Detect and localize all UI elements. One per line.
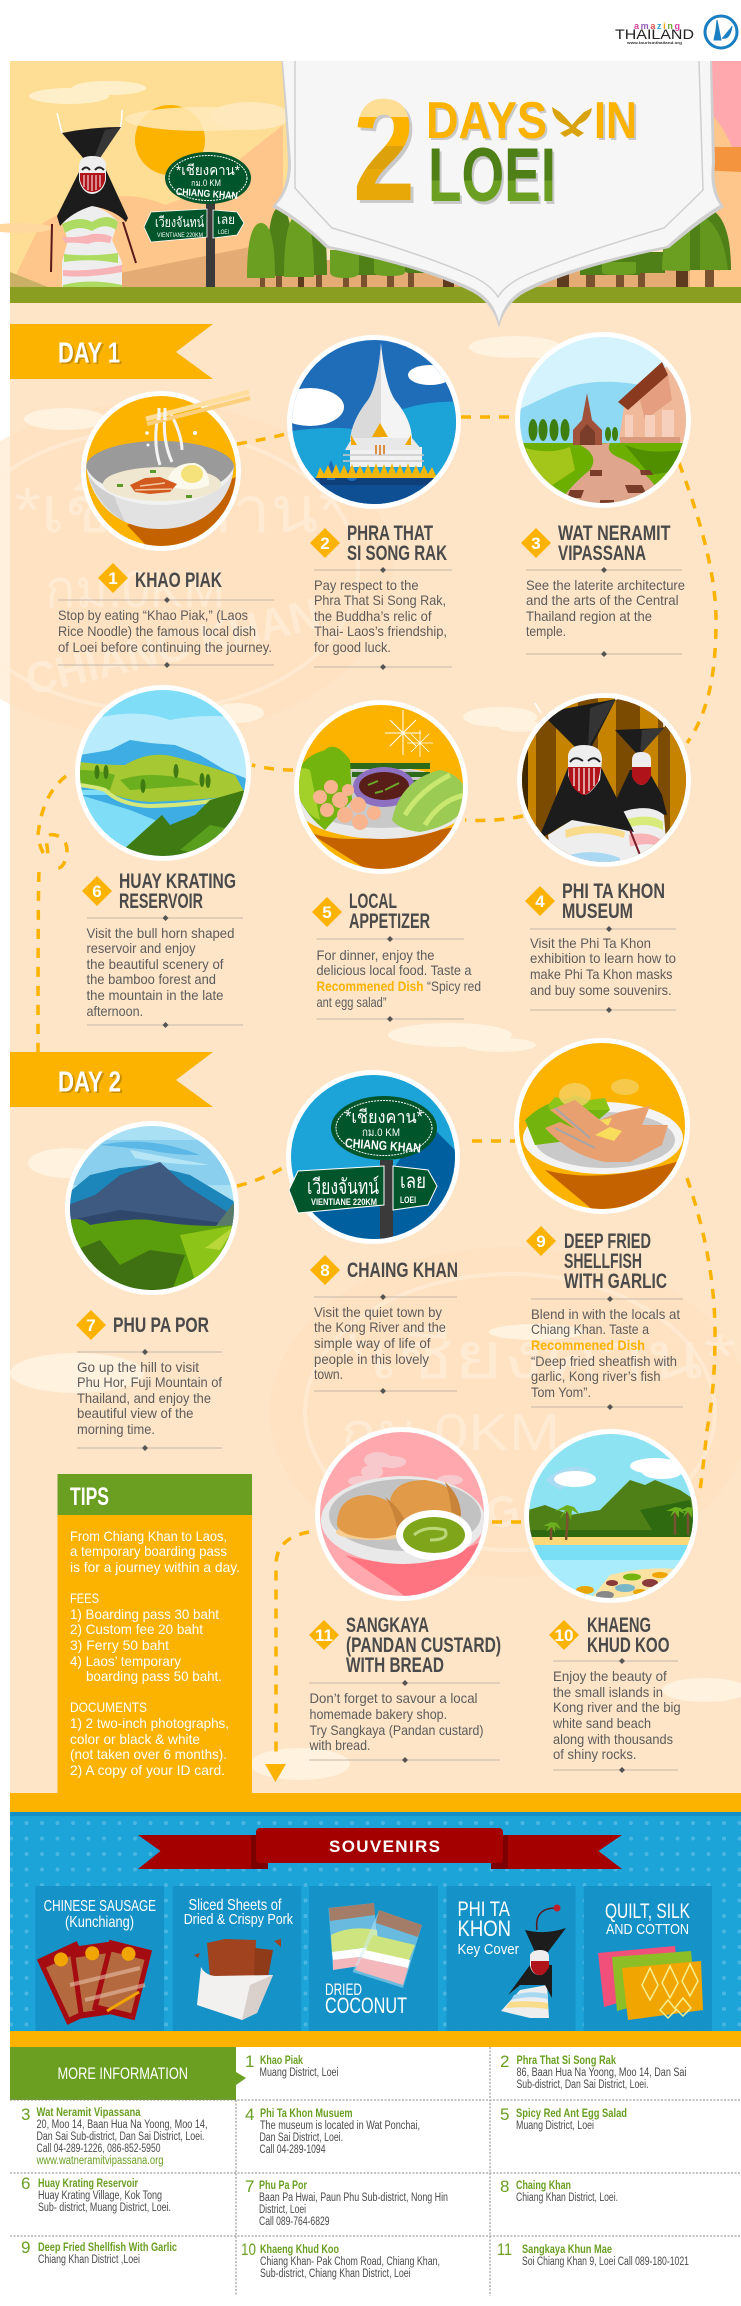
illustration: fried fish plate <box>514 1038 692 1216</box>
heading: Huay Krating Reservoir: HUAY KRATING <box>119 870 236 893</box>
info 3 <box>21 2105 208 2167</box>
logos: Amazing Thailand and TAT seal: amazing <box>634 21 680 31</box>
stop 7: Phu Pa Por <box>64 1120 240 1451</box>
heading: more information <box>10 2047 246 2100</box>
number badge 10 <box>549 1620 579 1650</box>
info 4: Phi Ta Khon Musuem <box>260 2106 353 2120</box>
illustration: Chiang Khan sign: *เชียงคาน* <box>345 1107 423 1127</box>
card: Chinese sausage: CHINESE SAUSAGE <box>44 1898 156 1915</box>
road sign: CHIANG KHAN <box>176 187 238 202</box>
tips text: color or black & white <box>70 1731 200 1747</box>
description: Phu Hor, Fuji Mountain of <box>77 1374 222 1390</box>
illustration: beach <box>524 1429 700 1605</box>
info 1: 1 <box>245 2052 254 2071</box>
card: quilt, silk and cotton: AND COTTON <box>606 1921 689 1938</box>
description: Pay respect to the <box>314 577 419 593</box>
title text: 2 <box>353 69 415 231</box>
description: of shiny rocks. <box>553 1746 636 1762</box>
description: morning time. <box>77 1421 155 1437</box>
background watermarks and clouds: *เชียงคาน* <box>336 1320 736 1392</box>
description: Thailand region at the <box>526 608 652 624</box>
card: dried crispy pork <box>173 1886 301 2031</box>
description: the Buddha’s relic of <box>314 608 432 624</box>
info 1 <box>245 2052 338 2079</box>
card: Chinese sausage <box>36 1886 164 2031</box>
description: Go up the hill to visit <box>77 1359 199 1375</box>
description: make Phi Ta Khon masks <box>530 966 672 982</box>
number badge 1 <box>98 563 128 593</box>
description: Visit the quiet town by <box>314 1304 442 1320</box>
info 5: Spicy Red Ant Egg Salad <box>516 2106 627 2120</box>
panel: tips <box>58 1474 252 1793</box>
heading: Deep Fried Shellfish With Garlic: DEEP FRIED <box>564 1230 651 1253</box>
description: Don’t forget to savour a local <box>310 1690 478 1706</box>
heading: Phi Ta Khon Museum <box>562 880 665 923</box>
banner: souvenirs <box>138 1828 622 1869</box>
day 2 ribbon <box>10 1052 213 1107</box>
heading: Local Appetizer: LOCAL <box>349 890 397 913</box>
description: the Kong River and the <box>314 1319 446 1335</box>
tips text: 1) Boarding pass 30 baht <box>70 1606 219 1622</box>
card: Phi Ta Khon key cover: KHON <box>458 1916 511 1941</box>
info 2: Phra That Si Song Rak <box>516 2053 616 2067</box>
number badge 2 <box>310 528 340 558</box>
description: Chiang Khan. Taste a <box>531 1321 649 1337</box>
description: For dinner, enjoy the <box>316 947 435 963</box>
illustration: Chiang Khan sign: CHIANG KHAN <box>345 1135 421 1156</box>
heading: Chaing Khan: CHAING KHAN <box>347 1259 458 1282</box>
stop 6: Huay Krating Reservoir <box>74 685 252 1028</box>
logos: Amazing Thailand and TAT seal: THAILAND <box>615 26 694 42</box>
heading: Sangkaya <box>346 1614 501 1677</box>
number badge 3 <box>521 528 551 558</box>
info 8 <box>500 2177 618 2204</box>
number badge 5 <box>312 897 342 927</box>
illustration: noodle bowl <box>80 390 250 555</box>
info 4 <box>245 2105 420 2156</box>
info 8: Chiang Khan District, Loei. <box>516 2192 618 2204</box>
number badge 9: 9 <box>536 1232 546 1251</box>
info 9 <box>21 2238 177 2266</box>
title text: 2 <box>356 72 418 234</box>
info 6: Huay Krating Village, Kok Tong <box>38 2190 162 2202</box>
info 5: Muang District, Loei <box>516 2120 594 2132</box>
logos: Amazing Thailand and TAT seal <box>615 16 737 48</box>
number badge 10: 10 <box>555 1626 573 1645</box>
card: quilt, silk and cotton: QUILT, SILK <box>605 1900 690 1923</box>
info 10 <box>241 2240 440 2280</box>
tips text <box>70 1528 240 1778</box>
heading: Wat Neramit Vipassana <box>558 522 671 565</box>
ground strip <box>10 287 741 303</box>
stop 10: Khaeng Khud Koo <box>524 1429 700 1773</box>
tips text: From Chiang Khan to Laos, <box>70 1528 227 1544</box>
heading: Sangkaya: SANGKAYA <box>346 1614 429 1637</box>
number badge 3: 3 <box>531 534 541 553</box>
number badge 6: 6 <box>92 882 102 901</box>
number badge 11: 11 <box>315 1626 333 1645</box>
heading: tips: TIPS <box>70 1483 109 1511</box>
heading: Khaeng Khud Koo <box>587 1614 670 1657</box>
heading: more information: MORE INFORMATION <box>58 2064 188 2083</box>
title text: LOEI <box>428 133 556 218</box>
card: dried crispy pork: Sliced Sheets of <box>188 1897 282 1914</box>
panel: souvenirs <box>10 1812 741 2031</box>
description: Visit the bull horn shaped <box>86 925 234 941</box>
info 7: 7 <box>245 2177 254 2196</box>
description: homemade bakery shop. <box>310 1706 447 1722</box>
info 2: Sub-district, Dan Sai District, Loei. <box>516 2079 648 2091</box>
info 1: Khao Piak <box>260 2053 303 2067</box>
info 7: Call 089-764-6829 <box>259 2216 330 2228</box>
description: Thai- Laos’s friendship, <box>314 623 447 639</box>
info 6: 6 <box>21 2174 30 2193</box>
description <box>530 926 676 1013</box>
description <box>314 1294 457 1394</box>
illustration: Chiang Khan sign: เวียงจันทน์ <box>307 1175 379 1199</box>
info 3: Wat Neramit Vipassana <box>36 2105 141 2119</box>
heading: Deep Fried Shellfish With Garlic <box>564 1230 667 1293</box>
description: delicious local food. Taste a <box>316 962 472 978</box>
info 10: 10 <box>241 2240 256 2259</box>
stop 11: Sangkaya <box>309 1427 501 1763</box>
illustration: masks <box>516 693 692 868</box>
description: Recommened Dish <box>531 1337 645 1353</box>
heading: Deep Fried Shellfish With Garlic: WITH GARLIC <box>564 1270 667 1293</box>
description: beautiful view of the <box>77 1405 194 1421</box>
road sign: *เชียงคาน* <box>176 162 241 178</box>
description: See the laterite architecture <box>526 577 685 593</box>
heading: Local Appetizer <box>349 890 430 933</box>
description: white sand beach <box>552 1715 651 1731</box>
description <box>552 1658 681 1773</box>
Phi Ta Khon figure <box>51 110 136 287</box>
banner: souvenirs: SOUVENIRS <box>329 1837 440 1856</box>
road sign: เวียงจันทน์ <box>155 214 204 230</box>
info 10: Khaeng Khud Koo <box>260 2242 339 2256</box>
stop 5: Local Appetizer <box>293 700 481 1022</box>
card: dried coconut: COCONUT <box>325 1993 407 2018</box>
info 9: Deep Fried Shellfish With Garlic <box>38 2240 177 2254</box>
day 2 ribbon: DAY 2 <box>60 1068 123 1100</box>
dashed route day 2 <box>237 1141 715 1753</box>
heading: Huay Krating Reservoir <box>119 870 236 913</box>
illustration: Chiang Khan sign: กม.0 KM <box>362 1127 400 1139</box>
road sign: VIENTIANE 220KM <box>157 233 203 239</box>
number badge 8: 8 <box>320 1261 330 1280</box>
card: Chinese sausage: (Kunchiang) <box>65 1914 134 1931</box>
description: Try Sangkaya (Pandan custard) <box>310 1722 484 1738</box>
info 5: 5 <box>500 2105 509 2124</box>
dashed route day 1 <box>38 417 716 1052</box>
heading: Phu Pa Por: PHU PA POR <box>113 1314 209 1337</box>
info 3: 20, Moo 14, Baan Hua Na Yoong, Moo 14, <box>36 2119 208 2131</box>
heading: Khao Piak: KHAO PIAK <box>135 569 222 592</box>
info 4: Call 04-289-1094 <box>260 2144 326 2156</box>
road sign <box>144 152 251 287</box>
day 1 ribbon: DAY 1 <box>58 338 120 370</box>
card: Phi Ta Khon key cover <box>446 1886 576 2031</box>
illustration: reservoir <box>74 685 252 865</box>
description: Stop by eating “Khao Piak,” (Laos <box>58 607 248 623</box>
number badge 5: 5 <box>322 903 332 922</box>
background watermarks and clouds: กม.0KM <box>340 1404 560 1462</box>
stop 3: Wat Neramit Vipassana <box>515 332 691 657</box>
description: Tom Yom”. <box>531 1384 591 1400</box>
info 7: Baan Pa Hwai, Paun Phu Sub-district, Nong Hin <box>259 2192 448 2204</box>
road sign: LOEI <box>218 230 229 236</box>
tips text: DOCUMENTS <box>70 1699 147 1715</box>
info 6: Huay Krating Reservoir <box>38 2176 138 2190</box>
background watermarks and clouds: CHIANG KHAN <box>351 1455 655 1570</box>
description: of Loei before continuing the journey. <box>58 639 272 655</box>
description: and the arts of the Central <box>526 592 678 608</box>
heading: Phi Ta Khon Museum: PHI TA KHON <box>562 880 665 903</box>
description: Enjoy the beauty of <box>553 1668 667 1684</box>
info 3: 3 <box>21 2105 30 2124</box>
background watermarks and clouds: กม.0KM <box>45 561 225 619</box>
description: afternoon. <box>86 1003 143 1019</box>
number badge 4: 4 <box>535 892 545 911</box>
background watermarks and clouds: *เชียงคาน* <box>14 474 345 546</box>
title text: DAYS <box>426 92 547 150</box>
number badge 6 <box>82 876 112 906</box>
description: people in this lovely <box>314 1351 429 1367</box>
description: Phra That Si Song Rak, <box>314 592 446 608</box>
description: exhibition to learn how to <box>530 950 676 966</box>
heading: Phra That Si Song Rak: PHRA THAT <box>347 522 433 545</box>
tips text: (not taken over 6 months). <box>70 1746 227 1762</box>
title text: DAYS <box>428 94 549 152</box>
heading: Khaeng Khud Koo: KHAENG <box>587 1614 651 1637</box>
illustration: Chiang Khan sign: เลย <box>400 1171 426 1193</box>
background watermarks and clouds: CHIANG KHAN <box>21 590 325 705</box>
number badge 8 <box>310 1255 340 1285</box>
number badge 1: 1 <box>108 569 118 588</box>
background panel <box>10 61 741 1793</box>
heading: Phi Ta Khon Museum: MUSEUM <box>562 900 633 923</box>
number badge 4 <box>525 886 555 916</box>
info 7: Phu Pa Por <box>259 2178 307 2192</box>
description: the bamboo forest and <box>86 971 216 987</box>
card: quilt, silk and cotton <box>584 1886 712 2031</box>
description: the small islands in <box>553 1684 663 1700</box>
description: town. <box>314 1366 343 1382</box>
illustration: Chiang Khan sign <box>285 1070 465 1250</box>
description: for good luck. <box>314 639 391 655</box>
info 11: 11 <box>497 2240 512 2259</box>
logos: Amazing Thailand and TAT seal: www.tourismthailand.org <box>626 40 683 45</box>
info 8: 8 <box>500 2177 509 2196</box>
description <box>526 567 685 657</box>
arrow: route end <box>265 1764 286 1782</box>
info 11: Sangkaya Khun Mae <box>522 2242 612 2256</box>
description: Rice Noodle) the famous local dish <box>58 623 256 639</box>
info 2: 86, Baan Hua Na Yoong, Moo 14, Dan Sai <box>516 2067 686 2079</box>
description: with bread. <box>309 1737 370 1753</box>
yellow band <box>10 2031 741 2047</box>
road sign: เลย <box>217 212 235 227</box>
stop 2: Phra That Si Song Rak <box>276 335 465 670</box>
illustration: pandan custard and bread <box>314 1427 490 1603</box>
header scene <box>0 61 741 287</box>
description: temple. <box>526 623 566 639</box>
tips text: 1) 2 two-inch photographs, <box>70 1715 229 1731</box>
info 2: 2 <box>500 2052 509 2071</box>
stop 9: Deep Fried Shellfish <box>514 1038 692 1410</box>
heading: Wat Neramit Vipassana: VIPASSANA <box>558 542 646 565</box>
info 7: District, Loei <box>259 2204 306 2216</box>
heading: Phra That Si Song Rak: SI SONG RAK <box>347 542 447 565</box>
info 11: Soi Chiang Khan 9, Loei Call 089-180-1021 <box>522 2256 689 2268</box>
tips text: 2) A copy of your ID card. <box>70 1762 225 1778</box>
info grid lines <box>10 2047 741 2296</box>
day 1 ribbon: DAY 1 <box>60 339 122 371</box>
card: Phi Ta Khon key cover: PHI TA <box>458 1898 510 1921</box>
description <box>58 597 274 668</box>
illustration: stupa <box>276 335 465 510</box>
info 3: Dan Sai Sub-district, Dan Sai District, Loei. <box>36 2131 204 2143</box>
tips text: a temporary boarding pass <box>70 1543 227 1559</box>
description <box>86 915 243 1028</box>
tips text: 4) Laos’ temporary <box>70 1653 181 1669</box>
info 11 <box>497 2240 689 2268</box>
tips text: FEES <box>70 1590 99 1606</box>
info 2 <box>500 2052 686 2091</box>
info 9: Chiang Khan District ,Loei <box>38 2254 140 2266</box>
description: garlic, Kong river’s fish <box>531 1368 660 1384</box>
road sign: กม.0 KM <box>191 178 221 188</box>
description <box>77 1349 222 1451</box>
info 6: Sub- district, Muang District, Loei. <box>38 2202 171 2214</box>
info 4: The museum is located in Wat Ponchai, <box>260 2120 420 2132</box>
heading: Sangkaya: (PANDAN CUSTARD) <box>346 1634 501 1657</box>
card: dried coconut: DRIED <box>325 1980 362 1999</box>
description: “Spicy red <box>427 978 481 994</box>
heading: Khaeng Khud Koo: KHUD KOO <box>587 1634 670 1657</box>
yellow band <box>10 1793 741 1812</box>
stop 1: Khao Piak <box>58 390 274 668</box>
description: Recommened Dish <box>316 978 424 994</box>
description: ant egg salad” <box>316 994 387 1010</box>
day 1 ribbon <box>10 324 213 379</box>
description: along with thousands <box>553 1731 673 1747</box>
card: dried coconut <box>309 1886 438 2031</box>
tips text: is for a journey within a day. <box>70 1559 240 1575</box>
heading: Phra That Si Song Rak <box>347 522 447 565</box>
description: Visit the Phi Ta Khon <box>530 935 651 951</box>
info 6 <box>21 2174 171 2214</box>
illustration: mountain <box>64 1120 240 1296</box>
info 10: Chiang Khan- Pak Chom Road, Chiang Khan, <box>260 2256 440 2268</box>
number badge 9 <box>526 1226 556 1256</box>
description: Thailand, and enjoy the <box>77 1390 211 1406</box>
stop 8: Chaing Khan <box>285 1070 465 1394</box>
description: Blend in with the locals at <box>531 1306 680 1322</box>
info 7 <box>245 2177 448 2228</box>
background watermarks and clouds <box>0 336 741 1780</box>
title text: IN <box>594 92 637 150</box>
info 1: Muang District, Loei <box>260 2067 338 2079</box>
heading: Wat Neramit Vipassana: WAT NERAMIT <box>558 522 671 545</box>
number badge 2: 2 <box>320 534 330 553</box>
description <box>531 1296 683 1410</box>
heading: Local Appetizer: APPETIZER <box>349 910 430 933</box>
illustration: Chiang Khan sign: VIENTIANE 220KM <box>311 1197 377 1207</box>
number badge 11 <box>309 1620 339 1650</box>
title text: IN <box>596 94 639 152</box>
info 3: www.watneramitvipassana.org <box>36 2155 164 2167</box>
description <box>309 1680 500 1763</box>
title shield <box>272 61 724 328</box>
stop 4: Phi Ta Khon Museum <box>516 693 692 1013</box>
heading: Deep Fried Shellfish With Garlic: SHELLFISH <box>564 1250 642 1273</box>
info 9: 9 <box>21 2238 30 2257</box>
info 4: Dan Sai District, Loei. <box>260 2132 343 2144</box>
info 3: Call 04-289-1226, 086-852-5950 <box>36 2143 160 2155</box>
description <box>316 936 481 1022</box>
title text <box>353 69 639 234</box>
description: “Deep fried sheatfish with <box>531 1353 677 1369</box>
heading: Sangkaya: WITH BREAD <box>346 1654 444 1677</box>
description: simple way of life of <box>314 1335 431 1351</box>
info 10: Sub-district, Chiang Khan District, Loei <box>260 2268 411 2280</box>
illustration: temple <box>515 332 691 510</box>
info 5 <box>500 2105 627 2132</box>
number badge 7: 7 <box>86 1316 96 1335</box>
illustration: Chiang Khan sign: LOEI <box>400 1195 416 1205</box>
info 8: Chaing Khan <box>516 2178 571 2192</box>
number badge 7 <box>76 1310 106 1340</box>
description: and buy some souvenirs. <box>530 982 672 998</box>
description <box>314 567 452 670</box>
tips text: boarding pass 50 baht. <box>86 1668 222 1684</box>
illustration: salad plate <box>293 700 469 875</box>
tips text: 2) Custom fee 20 baht <box>70 1621 203 1637</box>
title text: LOEI <box>430 136 558 221</box>
card: dried crispy pork: Dried & Crispy Pork <box>184 1911 293 1928</box>
heading: Huay Krating Reservoir: RESERVOIR <box>119 890 203 913</box>
day 2 ribbon: DAY 2 <box>58 1066 121 1098</box>
description: Kong river and the big <box>553 1699 681 1715</box>
info 4: 4 <box>245 2105 254 2124</box>
tips text: 3) Ferry 50 baht <box>70 1637 169 1653</box>
card: Phi Ta Khon key cover: Key Cover <box>458 1941 519 1958</box>
description: the beautiful scenery of <box>86 956 224 972</box>
description: the mountain in the late <box>86 987 224 1003</box>
description: reservoir and enjoy <box>86 940 196 956</box>
trees <box>247 206 731 287</box>
